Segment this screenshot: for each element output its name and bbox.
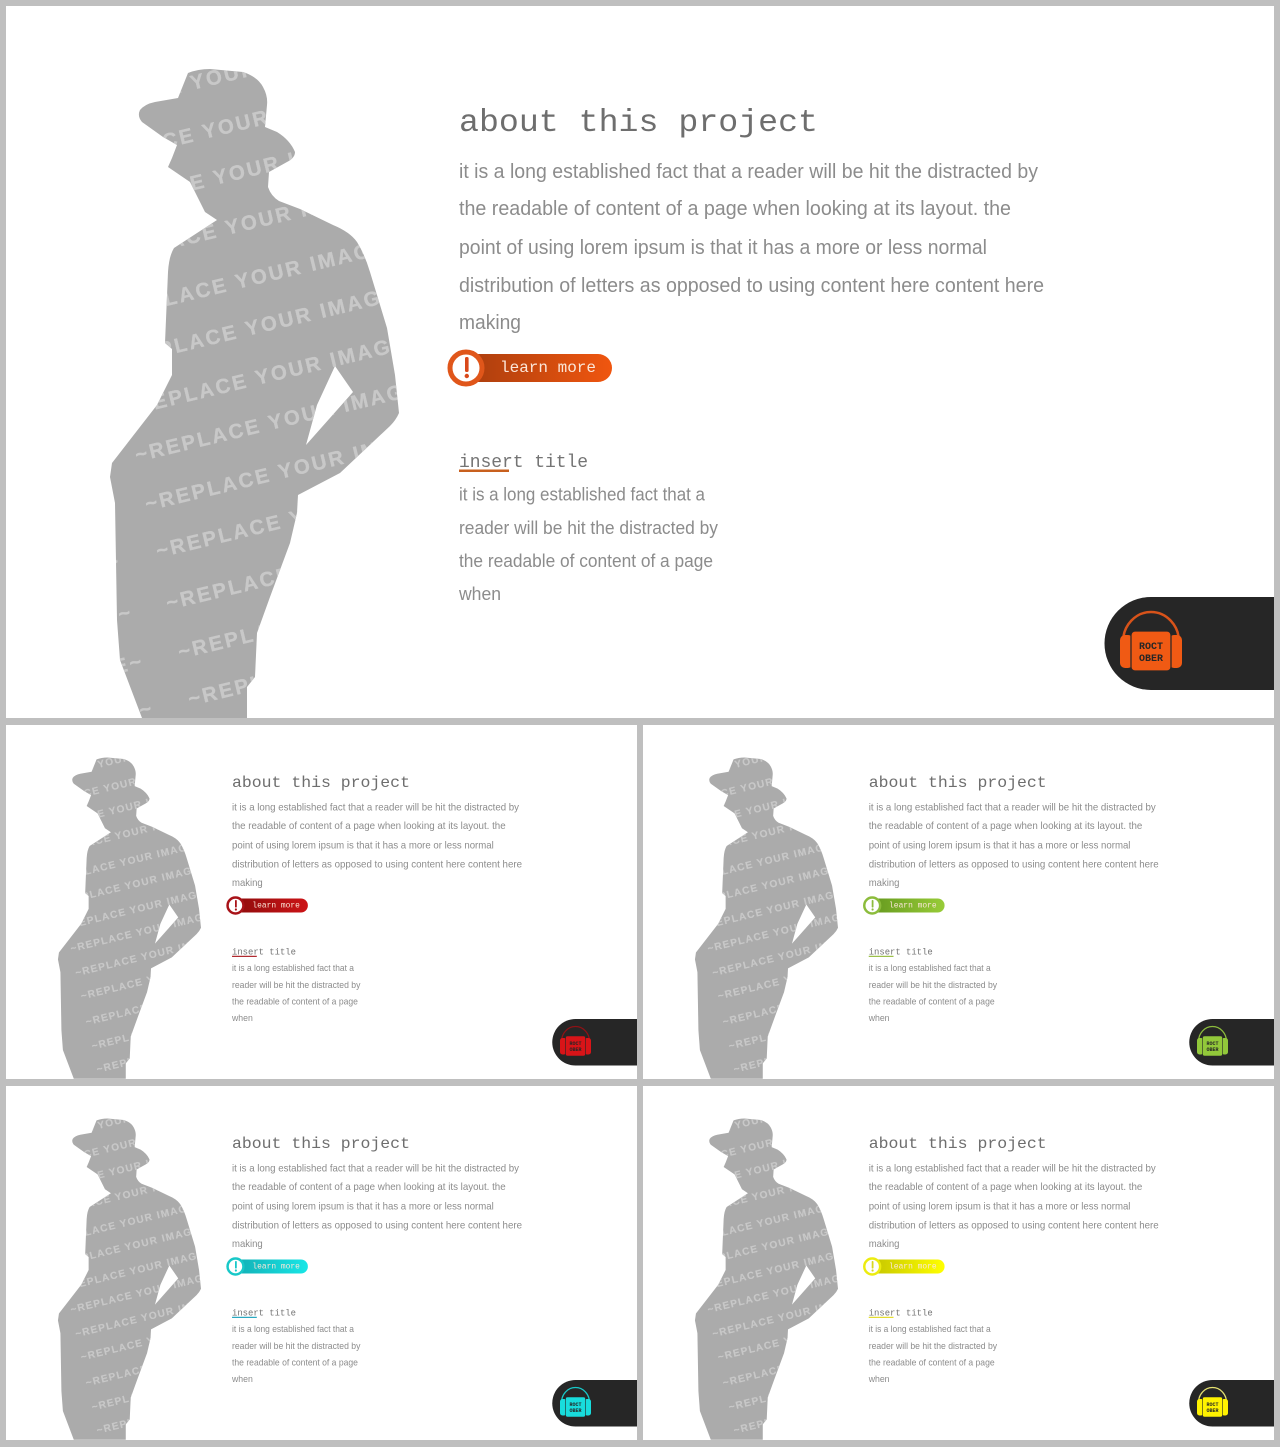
body text: making [232, 1239, 263, 1250]
image placeholder silhouette: ~REPLACE YOUR IMAGE~ [133, 373, 437, 467]
image placeholder silhouette: ~REPLACE YOUR IMAGE~ [706, 1270, 857, 1316]
button: learn more [450, 352, 612, 384]
body text: the readable of content of a page when looking at its layout. the [869, 1182, 1143, 1193]
body text: distribution of letters as opposed to using content here content here [459, 275, 1044, 297]
image placeholder silhouette [110, 69, 399, 718]
image placeholder silhouette: ~REPLACE YOUR IMAGE~ [700, 886, 850, 933]
image placeholder silhouette: ~REPLACE YOUR IMAGE~ [733, 1391, 883, 1437]
logo badge [1104, 597, 1274, 690]
body text: making [869, 878, 899, 889]
image placeholder silhouette: ~REPLACE YOUR IMAGE~ [722, 982, 872, 1028]
image placeholder silhouette: ~REPLACE YOUR IMAGE~ [668, 1101, 818, 1148]
image placeholder silhouette: ~REPLACE YOUR IMAGE~ [120, 328, 424, 422]
image placeholder silhouette: ~REPLACE YOUR IMAGE~ [143, 422, 447, 516]
image placeholder silhouette: ~REPLACE YOUR IMAGE~ [91, 1006, 241, 1052]
image placeholder silhouette: ~REPLACE YOUR IMAGE~ [674, 1126, 824, 1172]
sub text: the readable of content of a page [869, 996, 995, 1007]
body text: it is a long established fact that a reader will be hit the distracted by [869, 802, 1156, 814]
image placeholder silhouette: IMAGE~ [39, 600, 135, 645]
heading: about this project [232, 1135, 410, 1153]
sub text: when [231, 1013, 253, 1023]
sub text [868, 1324, 997, 1384]
image placeholder silhouette: ~REPLACE YOUR IMAGE~ [176, 570, 480, 664]
image placeholder silhouette: ~REPLACE YOUR IMAGE~ [31, 740, 181, 787]
image placeholder silhouette: ~REPLACE YOUR IMAGE~ [690, 1200, 840, 1246]
image placeholder silhouette: ~REPLACE YOUR IMAGE~ [690, 839, 840, 885]
sub text: when [868, 1374, 890, 1384]
body text: the readable of content of a page when looking at its layout. the [232, 821, 506, 832]
body text: point of using lorem ipsum is that it has a more or less normal [869, 840, 1130, 852]
button: learn more: learn more [889, 901, 937, 911]
sub text: the readable of content of a page [232, 1357, 358, 1368]
heading: about this project [232, 774, 410, 792]
image placeholder silhouette: ~REPLACE YOUR IMAGE~ [733, 1030, 883, 1076]
logo badge: OBER [1206, 1047, 1219, 1053]
image placeholder silhouette: ~REPLACE YOUR IMAGE~ [722, 1343, 872, 1389]
sub text: it is a long established fact that a [232, 963, 355, 973]
image placeholder silhouette: ~REPLACE YOUR IMAGE~ [80, 1317, 230, 1363]
image placeholder silhouette: ~REPLACE YOUR IMAGE~ [100, 232, 404, 326]
body text [232, 802, 522, 889]
subheading: insert title: insert title [232, 947, 296, 958]
body text [232, 1163, 522, 1250]
heading: about this project [459, 106, 818, 141]
body text: point of using lorem ipsum is that it has a more or less normal [459, 237, 987, 259]
heading: about this project [869, 1135, 1047, 1153]
image placeholder silhouette: ~REPLACE YOUR IMAGE~ [695, 862, 845, 908]
logo badge: OBER [569, 1047, 582, 1053]
subheading: insert title: insert title [869, 1308, 933, 1319]
image placeholder silhouette: ~REPLACE YOUR IMAGE~ [711, 933, 862, 979]
image placeholder silhouette: ~REPLACE YOUR IMAGE~ [55, 33, 359, 127]
body text: it is a long established fact that a reader will be hit the distracted by [232, 1163, 519, 1175]
image placeholder silhouette: ~REPLACE YOUR IMAGE~ [31, 1101, 181, 1148]
sub text: it is a long established fact that a [869, 1324, 991, 1334]
image placeholder silhouette: ~REPLACE YOUR IMAGE~ [154, 469, 458, 563]
subheading: insert title: insert title [232, 1308, 296, 1319]
logo badge [1189, 1019, 1274, 1066]
sub text [231, 963, 361, 1023]
button: learn more [228, 898, 308, 914]
body text: distribution of letters as opposed to using content here content here [232, 859, 522, 871]
image placeholder silhouette: ~REPLACE YOUR IMAGE~ [37, 765, 187, 811]
image placeholder silhouette: ~REPLACE YOUR IMAGE~ [717, 956, 867, 1002]
subheading: insert title: insert title [459, 453, 588, 473]
image placeholder silhouette: ~REPLACE YOUR IMAGE~ [164, 521, 468, 615]
body text: the readable of content of a page when looking at its layout. the [459, 198, 1011, 220]
text column [228, 1135, 522, 1384]
body text: point of using lorem ipsum is that it has a more or less normal [869, 1201, 1130, 1213]
sub text: reader will be hit the distracted by [459, 517, 719, 538]
sub text [868, 963, 997, 1023]
image placeholder silhouette: ~REPLACE YOUR IMAGE~ [674, 765, 824, 811]
image placeholder silhouette: ~REPLACE YOUR IMAGE~ [78, 128, 382, 222]
logo badge: OBER [1139, 654, 1163, 665]
sub text: reader will be hit the distracted by [232, 1341, 361, 1351]
sub text: the readable of content of a page [459, 550, 713, 571]
image placeholder silhouette: ~REPLACE YOUR IMAGE~ [74, 933, 225, 979]
sub text: when [868, 1013, 890, 1023]
body text: distribution of letters as opposed to using content here content here [869, 1220, 1159, 1232]
image placeholder silhouette [58, 758, 201, 1079]
button: learn more [228, 1258, 308, 1274]
body text: making [459, 312, 521, 334]
heading: about this project [869, 774, 1047, 792]
image placeholder silhouette: ~REPLACE YOUR IMAGE~ [42, 787, 192, 834]
sub text: it is a long established fact that a [459, 484, 706, 504]
slide: main orange [6, 6, 1274, 741]
image placeholder silhouette: ~REPLACE YOUR IMAGE~ [48, 812, 198, 858]
image placeholder silhouette: ~REPLACE YOUR IMAGE~ [700, 1247, 850, 1294]
logo badge: ROCT [569, 1402, 582, 1408]
button: learn more: learn more [889, 1262, 937, 1272]
body text: point of using lorem ipsum is that it has a more or less normal [232, 1201, 494, 1213]
sub text: the readable of content of a page [232, 996, 358, 1007]
image placeholder silhouette: IMAGE~ [27, 549, 123, 594]
image placeholder silhouette: ~REPLACE YOUR IMAGE~ [728, 1367, 878, 1413]
body text: it is a long established fact that a reader will be hit the distracted by [232, 802, 519, 814]
image placeholder silhouette: ~REPLACE YOUR IMAGE~ [63, 1247, 213, 1294]
body text: making [869, 1239, 899, 1250]
button: learn more [864, 1258, 945, 1274]
sub text: the readable of content of a page [869, 1357, 995, 1368]
image placeholder silhouette: ~REPLACE YOUR IMAGE~ [58, 862, 208, 908]
image placeholder silhouette: ~REPLACE YOUR IMAGE~ [53, 1200, 203, 1246]
sub text: it is a long established fact that a [232, 1324, 355, 1334]
image placeholder silhouette: IMAGE~ [60, 696, 156, 741]
image placeholder silhouette: ~REPLACE YOUR IMAGE~ [110, 279, 414, 373]
image placeholder silhouette: ~REPLACE YOUR IMAGE~ [695, 1223, 845, 1269]
image placeholder silhouette: ~REPLACE YOUR IMAGE~ [706, 909, 857, 955]
image placeholder silhouette: ~REPLACE YOUR IMAGE~ [679, 1148, 829, 1195]
image placeholder silhouette [695, 1118, 838, 1440]
logo badge: OBER [1206, 1408, 1219, 1414]
body text: it is a long established fact that a reader will be hit the distracted by [459, 161, 1038, 183]
image placeholder silhouette: ~REPLACE YOUR IMAGE~ [85, 982, 235, 1028]
slide: green [643, 725, 1274, 1079]
body text: making [232, 878, 263, 889]
logo badge: OBER [569, 1408, 582, 1414]
image placeholder silhouette [695, 758, 838, 1079]
sub text: reader will be hit the distracted by [869, 980, 997, 990]
body text: distribution of letters as opposed to using content here content here [232, 1220, 522, 1232]
body text: point of using lorem ipsum is that it has a more or less normal [232, 840, 494, 852]
subheading: insert title: insert title [869, 947, 933, 958]
sub text [458, 484, 719, 604]
image placeholder silhouette: ~REPLACE YOUR IMAGE~ [728, 1006, 878, 1052]
body text [869, 1163, 1159, 1250]
image placeholder silhouette: IMAGE~ [50, 649, 146, 694]
image placeholder silhouette: ~REPLACE YOUR IMAGE~ [91, 1367, 241, 1413]
sub text: when [458, 583, 501, 604]
button: learn more [864, 898, 945, 914]
image placeholder silhouette: ~REPLACE YOUR IMAGE~ [69, 909, 220, 955]
body text [459, 161, 1044, 334]
slide: red [6, 725, 637, 1079]
image placeholder silhouette: ~REPLACE YOUR IMAGE~ [74, 1294, 225, 1340]
sub text [231, 1324, 361, 1384]
body text: it is a long established fact that a reader will be hit the distracted by [869, 1163, 1156, 1175]
text column [228, 774, 522, 1023]
image placeholder silhouette: ~REPLACE YOUR IMAGE~ [685, 1173, 835, 1219]
body text: the readable of content of a page when looking at its layout. the [869, 821, 1143, 832]
button: learn more: learn more [252, 1262, 300, 1272]
image placeholder silhouette: ~REPLACE YOUR IMAGE~ [90, 178, 394, 272]
image placeholder silhouette: ~REPLACE YOUR IMAGE~ [80, 956, 230, 1002]
logo badge [552, 1380, 637, 1426]
body text [869, 802, 1159, 889]
sub text: reader will be hit the distracted by [232, 980, 361, 990]
sub text: reader will be hit the distracted by [869, 1341, 997, 1351]
image placeholder silhouette: ~REPLACE YOUR IMAGE~ [685, 812, 835, 858]
button: learn more: learn more [500, 359, 596, 377]
sub text: when [231, 1374, 253, 1384]
image placeholder silhouette: ~REPLACE YOUR IMAGE~ [711, 1294, 862, 1340]
image placeholder silhouette: ~REPLACE YOUR IMAGE~ [58, 1223, 208, 1269]
logo badge: ROCT [1206, 1041, 1219, 1047]
image placeholder silhouette: ~REPLACE YOUR IMAGE~ [37, 1126, 187, 1172]
image placeholder silhouette: ~REPLACE YOUR IMAGE~ [186, 617, 490, 711]
image placeholder silhouette: ~REPLACE YOUR IMAGE~ [67, 82, 371, 176]
slide: yellow [643, 1086, 1274, 1440]
logo badge [552, 1019, 637, 1066]
button: learn more: learn more [252, 901, 300, 911]
body text: distribution of letters as opposed to using content here content here [869, 859, 1159, 871]
image placeholder silhouette: ~REPLACE YOUR IMAGE~ [96, 1030, 246, 1076]
body text: the readable of content of a page when looking at its layout. the [232, 1182, 506, 1193]
text column [864, 1135, 1159, 1384]
text column [864, 774, 1159, 1023]
image placeholder silhouette: ~REPLACE YOUR IMAGE~ [96, 1391, 246, 1437]
image placeholder silhouette: ~REPLACE YOUR IMAGE~ [69, 1270, 220, 1316]
slide: cyan [6, 1086, 637, 1440]
logo badge: ROCT [1139, 642, 1163, 653]
logo badge [1189, 1380, 1274, 1426]
image placeholder silhouette: ~REPLACE YOUR IMAGE~ [63, 886, 213, 933]
image placeholder silhouette: ~REPLACE YOUR IMAGE~ [679, 787, 829, 834]
image placeholder silhouette: ~REPLACE YOUR IMAGE~ [53, 839, 203, 885]
image placeholder silhouette [58, 1118, 201, 1440]
logo badge: ROCT [569, 1041, 582, 1047]
image placeholder silhouette: ~REPLACE YOUR IMAGE~ [85, 1343, 235, 1389]
sub text: it is a long established fact that a [869, 963, 991, 973]
image placeholder silhouette: ~REPLACE YOUR IMAGE~ [48, 1173, 198, 1219]
image placeholder silhouette: ~REPLACE YOUR IMAGE~ [717, 1317, 867, 1363]
image placeholder silhouette: ~REPLACE YOUR IMAGE~ [42, 1148, 192, 1195]
logo badge: ROCT [1206, 1402, 1219, 1408]
image placeholder silhouette: ~REPLACE YOUR IMAGE~ [668, 740, 818, 787]
